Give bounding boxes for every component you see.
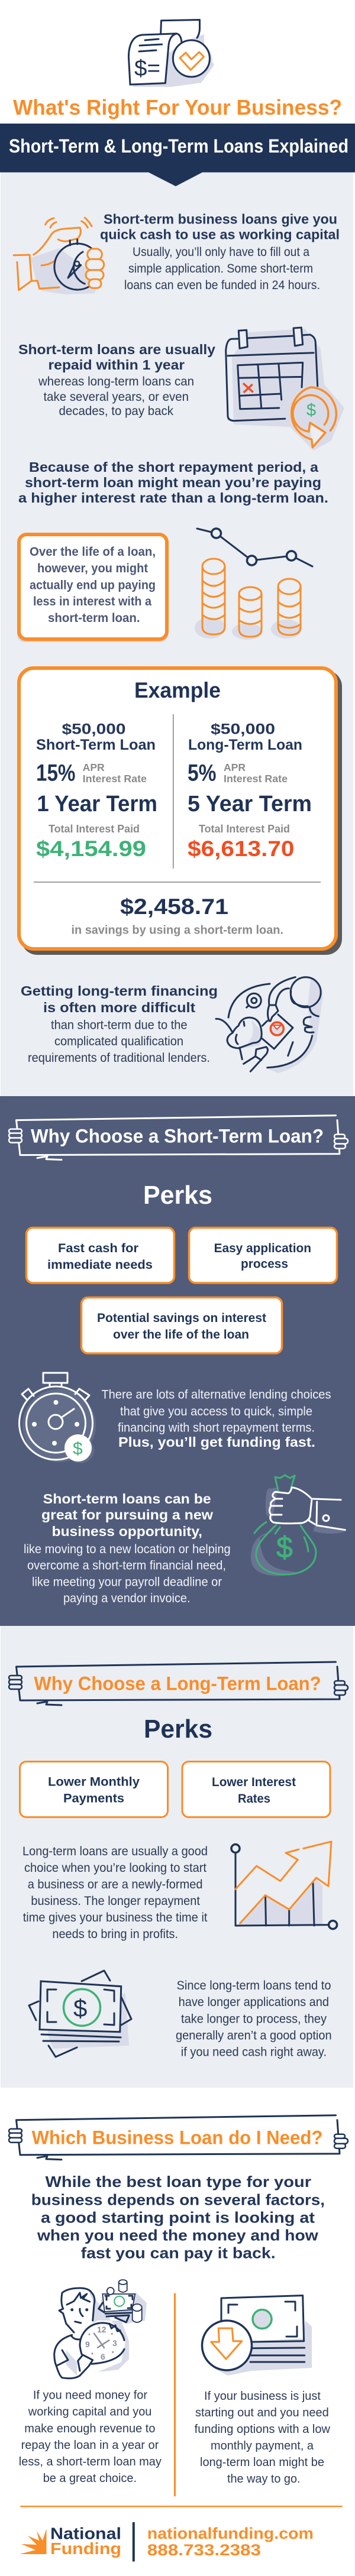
perk: lower monthly payments: Payments — [63, 1791, 124, 1806]
column: short-term loan: $50,000 — [62, 721, 125, 738]
column: short-term loan: Short-Term Loan — [36, 737, 156, 753]
text block: repaid within 1 year: Short-term loans are usually — [18, 342, 215, 357]
banner: which business loan — [9, 2115, 348, 2160]
text block: long-term good choice: needs to bring in profits. — [52, 1927, 178, 1941]
icon: person holding clock with money: 9 — [85, 2340, 90, 2349]
perk: fast cash: immediate needs — [47, 1258, 153, 1272]
text block: long-term good choice — [22, 1845, 208, 1941]
text block: quick cash: quick cash to use as working capital — [100, 227, 340, 242]
text block: long-term application drawbacks — [176, 1979, 332, 2059]
text block: long-term good choice: a business or are a newly-formed — [28, 1878, 202, 1891]
banner: which business loan: Which Business Loan do I Need? — [32, 2127, 322, 2149]
callout: less interest: less in interest with a — [33, 594, 152, 608]
perk: potential savings: over the life of the loan — [113, 1328, 249, 1342]
text block: repaid within 1 year: take several years, or even — [44, 390, 189, 404]
text block: long-term recommendation: funding options with a low — [195, 2423, 331, 2436]
callout: less interest: actually end up paying — [30, 578, 156, 592]
text block: quick cash — [100, 212, 340, 292]
text block: long-term application drawbacks: if you need cash right away. — [181, 2046, 327, 2059]
column: long-term loan: Interest Rate — [224, 773, 288, 785]
text block: starting point: when you need the money and how — [37, 2226, 319, 2244]
column: long-term loan: 5% — [188, 760, 217, 786]
text block: new business opportunity: like moving to a new location or helping — [24, 1543, 231, 1556]
text block: alternative lending — [101, 1388, 331, 1450]
icon: person holding clock with money: 3 — [112, 2338, 117, 2348]
perk: lower monthly payments — [20, 1762, 168, 1817]
callout: less interest: Over the life of a loan, — [30, 545, 156, 559]
text block: quick cash: loans can even be funded in 24 hours. — [124, 278, 320, 292]
text block: starting point: fast you can pay it back. — [81, 2244, 276, 2262]
icon: hand holding money bag — [251, 1475, 346, 1576]
text block: short-term recommendation: less, a short-term loan may — [19, 2455, 162, 2468]
perk: easy application — [189, 1227, 337, 1283]
perk: potential savings — [82, 1297, 282, 1353]
text block: starting point: business depends on several factors, — [31, 2191, 325, 2208]
savings total: $2,458.71 — [120, 895, 228, 919]
banner: why choose long-term — [9, 1662, 348, 1705]
text block: long-term financing difficulty: Getting long-term financing — [21, 983, 218, 999]
icon: cash with down arrow — [202, 2295, 312, 2376]
perk: potential savings: Potential savings on interest — [97, 1311, 266, 1325]
icon: stopwatch with dollar — [19, 1373, 96, 1463]
text block: alternative lending: that give you access to quick, simple — [120, 1405, 312, 1418]
text block: higher interest rate: short-term loan might mean you’re paying — [25, 475, 321, 490]
text block: long-term good choice: Long-term loans are usually a good — [22, 1845, 208, 1858]
perk: easy application: Easy application — [214, 1242, 311, 1255]
text block: long-term recommendation: If your business is just — [204, 2390, 321, 2403]
column: short-term loan: $4,154.99 — [36, 837, 146, 861]
text block: quick cash: Usually, you’ll only have to fill out a — [133, 245, 309, 259]
contact details: nationalfunding.com — [147, 2525, 314, 2542]
banner: why choose short-term: Why Choose a Short-Term Loan? — [31, 1126, 324, 1147]
text block: starting point: a good starting point is looking at — [41, 2208, 315, 2226]
text block: long-term financing difficulty: than short-term due to the — [51, 1019, 187, 1032]
title: What's Right For Your Business? — [13, 95, 342, 119]
text block: higher interest rate — [18, 459, 328, 506]
column: long-term loan: APR — [224, 762, 246, 773]
banner: why choose long-term: Why Choose a Long-Term Loan? — [34, 1673, 321, 1694]
text block: short-term recommendation: make enough revenue to — [24, 2422, 155, 2435]
icon: hands exchanging envelope — [216, 977, 322, 1073]
text block: repaid within 1 year — [18, 342, 215, 418]
text block: long-term financing difficulty: is often more difficult — [43, 1000, 195, 1015]
text block: starting point: While the best loan type for your — [45, 2173, 311, 2191]
text block: long-term recommendation: monthly payment, a — [211, 2439, 314, 2452]
icon: rising chart — [231, 1842, 337, 1929]
icon: receipt with check — [128, 20, 214, 87]
icon: calendar with coin — [226, 328, 344, 451]
text block: long-term recommendation: long-term loan might be — [200, 2456, 324, 2469]
heading: example: Example — [134, 678, 221, 702]
text block: new business opportunity: Short-term loans can be — [43, 1491, 211, 1506]
text block: new business opportunity: overcome a short-term financial need, — [27, 1558, 226, 1573]
column: short-term loan: APR — [83, 762, 105, 773]
text block: short-term recommendation: be a great choice. — [43, 2472, 137, 2485]
column: long-term loan: 5 Year Term — [188, 792, 312, 816]
panel: why choose short-term background — [0, 1096, 355, 1626]
banner: why choose short-term — [9, 1116, 348, 1160]
logo: national funding: National — [50, 2524, 121, 2542]
heading: perks short-term: Perks — [143, 1181, 212, 1210]
text block: alternative lending: financing with short repayment terms. — [118, 1421, 315, 1434]
icon: hand holding stopwatch — [14, 218, 104, 294]
icon: hand holding money bag: $ — [276, 1531, 293, 1564]
text block: new business opportunity: like meeting your payroll deadline or — [32, 1576, 222, 1589]
column: short-term loan: Total Interest Paid — [49, 823, 140, 835]
text block: alternative lending: There are lots of alternative lending choices — [101, 1388, 331, 1402]
perk: easy application: process — [241, 1258, 288, 1271]
text block: long-term recommendation: the way to go. — [227, 2473, 301, 2486]
icon: person holding clock with money — [54, 2280, 147, 2379]
panel: why choose long-term background — [1, 1626, 353, 2088]
column: long-term loan — [188, 721, 312, 861]
text block: short-term recommendation — [19, 2389, 162, 2485]
text block: starting point — [31, 2173, 325, 2262]
logo: national funding: Funding — [50, 2539, 121, 2558]
text block: new business opportunity: business opportunity, — [52, 1524, 202, 1539]
text block: new business opportunity: paying a vendor invoice. — [63, 1592, 191, 1605]
icon: stopwatch with dollar: $ — [73, 1439, 83, 1459]
text block: long-term application drawbacks: have longer applications and — [179, 1995, 329, 2009]
logo: national funding — [20, 2524, 121, 2558]
text block: repaid within 1 year: decades, to pay back — [59, 404, 173, 418]
text block: alternative lending: Plus, you’ll get funding fast. — [118, 1434, 315, 1450]
text block: long-term recommendation — [195, 2390, 331, 2486]
text block: short-term recommendation: If you need money for — [33, 2389, 147, 2402]
icon: person holding clock with money: 6 — [101, 2352, 105, 2361]
text block: long-term financing difficulty — [21, 983, 218, 1065]
text block: long-term good choice: time gives your business the time it — [23, 1911, 208, 1924]
text block: new business opportunity: great for pursuing a new — [41, 1507, 213, 1522]
text block: quick cash: simple application. Some short-term — [128, 262, 313, 276]
icon: receipt with check: $= — [134, 56, 160, 81]
perk: lower interest rates: Rates — [238, 1792, 270, 1806]
text block: long-term application drawbacks: Since long-term loans tend to — [176, 1979, 331, 1992]
icon: coin stacks with falling line — [195, 529, 312, 640]
text block: long-term financing difficulty: complicated qualification — [54, 1035, 183, 1048]
text block: long-term good choice: choice when you’re looking to start — [24, 1861, 206, 1875]
text block: higher interest rate: a higher interest rate than a long-term loan. — [18, 490, 328, 506]
contact details: 888.733.2383 — [147, 2541, 261, 2559]
text block: repaid within 1 year: whereas long-term loans can — [38, 375, 194, 388]
text block: long-term recommendation: starting out and you need — [195, 2406, 329, 2419]
text block: long-term good choice: business. The longer repayment — [31, 1894, 200, 1908]
icon: calendar with coin: $ — [306, 401, 316, 420]
column: long-term loan: $50,000 — [211, 721, 275, 738]
banner: navy heading with arrow — [0, 124, 355, 186]
icon: cash stack: $ — [73, 1994, 87, 2022]
perk: fast cash: Fast cash for — [58, 1242, 138, 1255]
text block: short-term recommendation: repay the loan in a year or — [21, 2439, 159, 2452]
text block: repaid within 1 year: repaid within 1 year — [49, 357, 185, 372]
savings total — [71, 895, 283, 937]
perk: lower monthly payments: Lower Monthly — [48, 1775, 140, 1788]
column: short-term loan: 1 Year Term — [37, 792, 157, 816]
column: short-term loan — [36, 721, 157, 861]
contact details — [147, 2525, 314, 2559]
column: long-term loan: $6,613.70 — [188, 837, 295, 861]
text block: long-term financing difficulty: requirements of traditional lenders. — [28, 1051, 210, 1065]
icon: person holding clock with money: 12 — [97, 2325, 106, 2334]
column: long-term loan: Total Interest Paid — [199, 823, 290, 835]
text block: long-term application drawbacks: take longer to process, they — [181, 2012, 327, 2026]
savings total: in savings by using a short-term loan. — [71, 924, 283, 937]
text block: short-term recommendation: working capital and you — [28, 2406, 151, 2419]
callout: less interest: however, you might — [37, 561, 148, 575]
perk: lower interest rates: Lower Interest — [212, 1775, 296, 1789]
text block: quick cash: Short-term business loans give you — [104, 212, 337, 227]
panel: example — [19, 668, 342, 955]
icon: cash stack — [29, 1971, 131, 2057]
text block: higher interest rate: Because of the short repayment period, a — [29, 459, 318, 475]
column: short-term loan: 15% — [36, 760, 75, 786]
column: long-term loan: Long-Term Loan — [188, 737, 302, 753]
perk: fast cash — [26, 1227, 174, 1283]
column: short-term loan: Interest Rate — [83, 773, 147, 785]
callout: less interest — [17, 534, 168, 642]
callout: less interest: short-term loan. — [48, 611, 140, 625]
text block: long-term application drawbacks: generally aren’t a good option — [176, 2029, 332, 2042]
text block: new business opportunity — [24, 1491, 231, 1605]
perk: lower interest rates — [182, 1762, 330, 1817]
heading: perks long-term: Perks — [144, 1715, 212, 1744]
panel: intro background — [1, 172, 353, 1096]
